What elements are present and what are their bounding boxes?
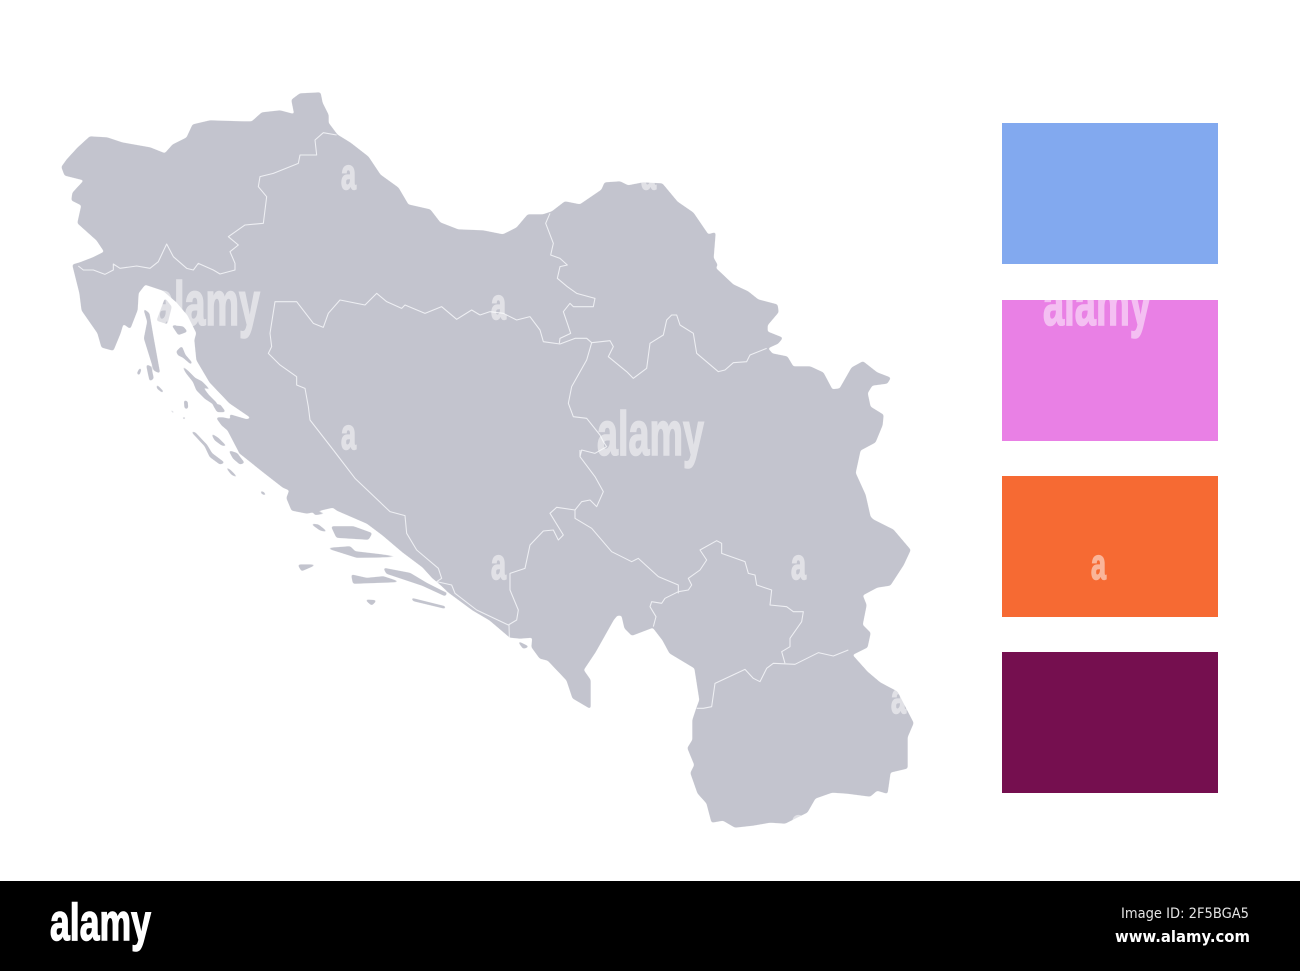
footer bar	[0, 881, 1300, 971]
watermark mark 7: a	[1091, 540, 1106, 589]
watermark mark 9: a	[791, 800, 806, 849]
watermark: left: alamy	[153, 270, 260, 339]
border: Sava and Danube	[480, 312, 767, 378]
border: Montenegro and Serbia	[575, 510, 678, 593]
watermark mark 8: a	[891, 674, 906, 723]
watermark: on pink swatch: alamy	[1043, 270, 1151, 339]
watermarks	[153, 150, 1151, 849]
map: former Yugoslavia	[62, 93, 913, 827]
watermark: centre: alamy	[597, 400, 704, 469]
central Adriatic islands	[137, 347, 266, 495]
watermark mark 3: a	[341, 410, 356, 459]
swatch: orange	[1002, 476, 1218, 617]
watermark mark 1: a	[341, 150, 356, 199]
map silhouette	[62, 93, 913, 827]
footer logo: alamy	[50, 894, 151, 952]
southern Adriatic islands	[298, 512, 528, 648]
border: Bosnia, Croatia and Montenegro, south	[333, 450, 603, 625]
swatch: purple	[1002, 652, 1218, 793]
border: Bay of Kotor	[507, 625, 511, 637]
border: Bosnia and Serbia	[568, 343, 607, 457]
border: Kosovo	[650, 541, 803, 663]
watermark mark 6: a	[791, 540, 806, 589]
watermark mark 2: a	[641, 150, 656, 199]
watermark mark 4: a	[491, 280, 506, 329]
website: www.alamy.com	[1115, 927, 1250, 946]
border: Croatia and Bosnia, west and north	[268, 293, 480, 450]
swatch: pink	[1002, 300, 1218, 441]
border: Slovenia and Croatia	[78, 133, 337, 274]
landmass and islands	[62, 93, 913, 827]
border: North Macedonia	[697, 650, 848, 708]
northern Adriatic islands	[143, 298, 187, 373]
swatch: blue	[1002, 123, 1218, 264]
legend swatches	[1002, 123, 1218, 793]
watermark mark 5: a	[491, 540, 506, 589]
border: Croatia and Vojvodina	[546, 213, 595, 343]
image id: Image ID: 2F5BGA5	[1121, 906, 1249, 922]
